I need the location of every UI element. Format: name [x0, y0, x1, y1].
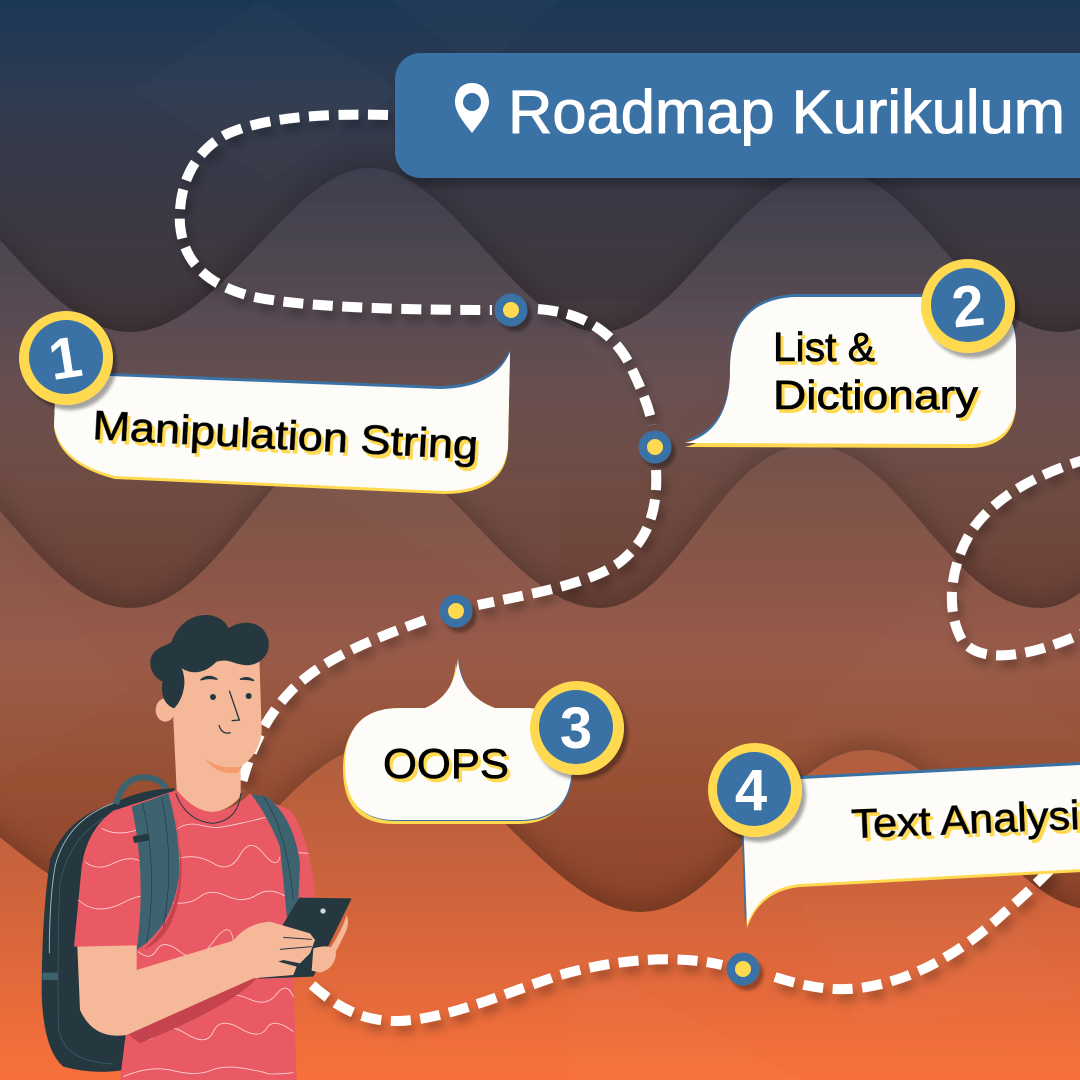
neck and face [173, 657, 262, 812]
wave layer 2 [0, 440, 1080, 1080]
roadmap dashed path [180, 115, 1080, 1021]
left strap [132, 793, 179, 950]
ear [156, 698, 175, 722]
phone [258, 898, 352, 979]
title banner [395, 53, 1080, 178]
wave layer 1 shading [0, 168, 1080, 620]
backpack [42, 788, 175, 1072]
upper back finger [327, 915, 348, 953]
icon: location pin [455, 83, 489, 133]
hair [150, 615, 269, 708]
strap shadow [143, 813, 182, 949]
waypoint 4 [726, 952, 760, 986]
wave layer 3 [0, 745, 1080, 1080]
waypoint 2 [638, 430, 672, 464]
shirt wave pattern [78, 817, 308, 1077]
character: student with backpack and phone [42, 615, 352, 1080]
wave layer 2 shading [0, 440, 1080, 920]
waypoint 3 [440, 594, 472, 628]
shirt [74, 790, 315, 1080]
number badge 1 [19, 311, 113, 405]
title text: Roadmap Kurikulum [508, 78, 1065, 146]
jaw shadow [205, 758, 241, 773]
neckline [176, 793, 241, 823]
label text: Dictionary [773, 372, 979, 418]
label text: List & [773, 324, 875, 370]
number badge 2: 2 [949, 272, 988, 341]
number badge 3: 3 [560, 696, 592, 761]
right strap [251, 794, 300, 922]
background top shading [0, 0, 1080, 340]
eyes and brows [201, 676, 254, 700]
panel: step 3 OOPS [343, 658, 624, 824]
panel: step 4 Text Analysis [708, 743, 1080, 928]
nose and smile [219, 691, 239, 733]
panel: step 2 List & Dictionary [685, 259, 1016, 448]
label text [773, 324, 979, 418]
arm and hand [77, 922, 315, 1036]
number badge 2 [921, 259, 1015, 353]
panel: step 1 Manipulation String [19, 311, 510, 494]
waypoint 1 [494, 294, 528, 326]
number badge 1: 1 [44, 324, 86, 393]
number badge 4: 4 [735, 758, 767, 823]
number badge 4 [708, 743, 802, 837]
back fingers [312, 946, 336, 973]
waypoint dots [440, 294, 760, 986]
label text: OOPS [383, 740, 509, 787]
strap tag [133, 834, 150, 843]
backpack handle [116, 777, 166, 804]
arm shadow [127, 977, 257, 1043]
number badge 3 [530, 681, 624, 775]
label text: Manipulation String [92, 402, 479, 468]
